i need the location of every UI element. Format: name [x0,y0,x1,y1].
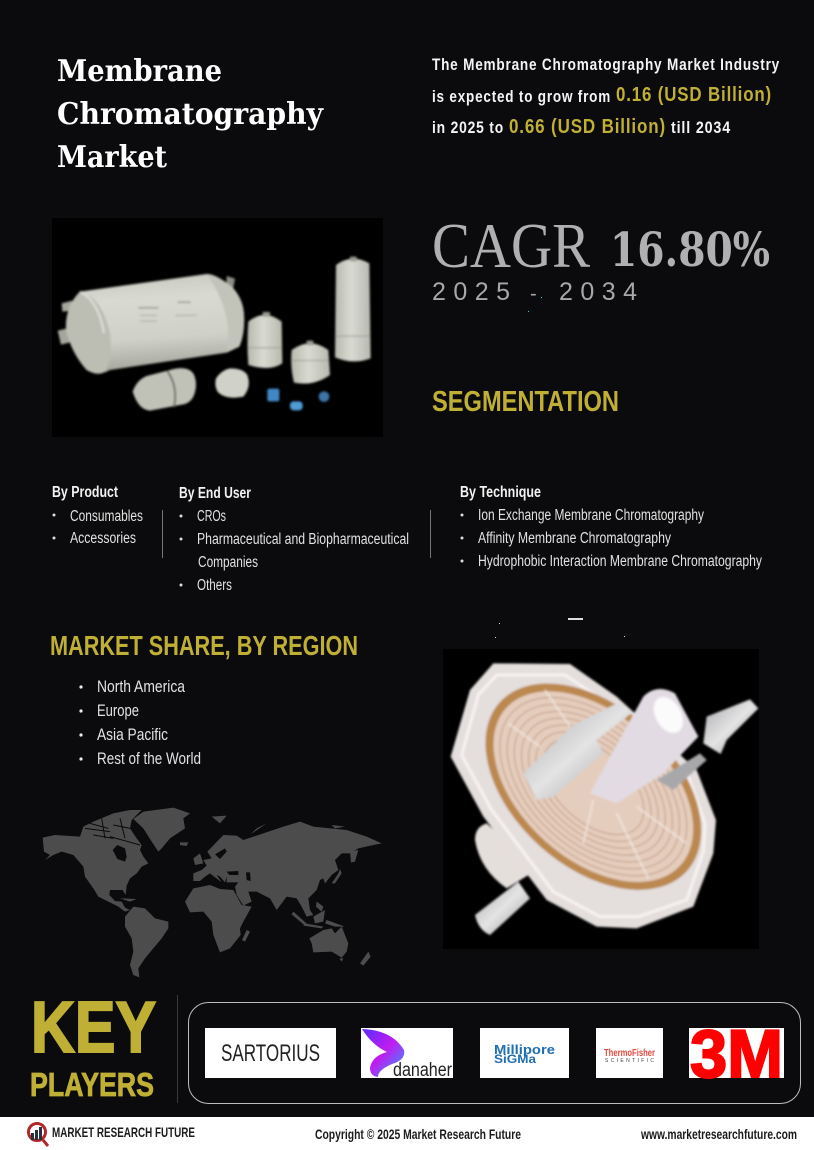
list: by product: By Product [52,484,119,501]
list: by product: Accessories [70,530,136,547]
list: by end user: Pharmaceutical and Biopharmaceutical [197,531,409,548]
list: by technique [460,484,762,570]
list: by end user: Others [197,577,232,594]
footer: Copyright © 2025 Market Research Future [315,1127,521,1142]
market growth summary text: is expected to grow from [432,87,611,106]
logo: 3M: 3M [690,1016,783,1092]
logo: Danaher: danaher [393,1060,453,1081]
market growth summary text [432,55,780,138]
footer [0,1117,814,1150]
logo: Thermo Fisher Scientific [596,1028,663,1078]
heading: key players: PLAYERS [30,1066,154,1103]
stray marks [495,618,625,638]
list: by end user: By End User [179,485,251,502]
list: regions: Rest of the World [97,749,201,768]
list: by end user: CROs [197,508,226,525]
footer: MARKET RESEARCH FUTURE [52,1124,195,1140]
list: by product: Consumables [70,508,143,525]
photo: membrane chromatography capsules [52,218,383,437]
list: by technique: By Technique [460,484,541,501]
logo: Thermo Fisher Scientific: SCIENTIFIC [605,1058,654,1064]
list: regions: Asia Pacific [97,725,168,744]
logo: Thermo Fisher Scientific: ThermoFisher [604,1048,655,1059]
list: regions: Europe [97,701,139,720]
panel: key player logos [188,1002,800,1104]
CAGR figure: 2025 [432,278,510,306]
market growth summary text: 0.16 (USD Billion) [616,84,772,106]
logo: MilliporeSigma [480,1028,569,1078]
CAGR figure: - [530,283,537,305]
heading: market share by region: MARKET SHARE, BY REGION [50,630,358,661]
title: Membrane [57,54,222,89]
list: by technique: Ion Exchange Membrane Chromatography [478,507,704,524]
heading: key players [30,988,156,1103]
CAGR figure [432,210,770,312]
list: by technique: Affinity Membrane Chromatography [478,530,671,547]
CAGR figure: CAGR [432,210,590,281]
list: by end user: Companies [198,554,258,571]
logo: Sartorius: SARTORIUS [221,1040,320,1067]
market growth summary text: in 2025 to [432,118,504,137]
title: Chromatography [57,97,324,132]
logo: MilliporeSigma: Millipore [494,1042,555,1057]
list: regions [79,677,201,768]
heading: key players: KEY [31,988,156,1068]
icon: market research future magnifier [28,1124,48,1146]
heading: segmentation: SEGMENTATION [432,386,619,418]
logo: Danaher [361,1028,453,1081]
list: by end user [179,485,409,594]
title: Market [57,140,167,175]
market growth summary text: till 2034 [671,118,731,137]
CAGR figure: 16.80% [610,223,770,278]
list: by product [52,484,143,547]
logo: Sartorius [205,1028,336,1078]
list: regions: North America [97,677,185,696]
CAGR figure: 2034 [559,278,637,306]
title [57,54,324,175]
logo: MilliporeSigma: SiGMa [494,1052,536,1066]
photo: syringe filter membrane unit [443,643,759,949]
market growth summary text: 0.66 (USD Billion) [509,116,666,138]
world map [43,808,382,977]
